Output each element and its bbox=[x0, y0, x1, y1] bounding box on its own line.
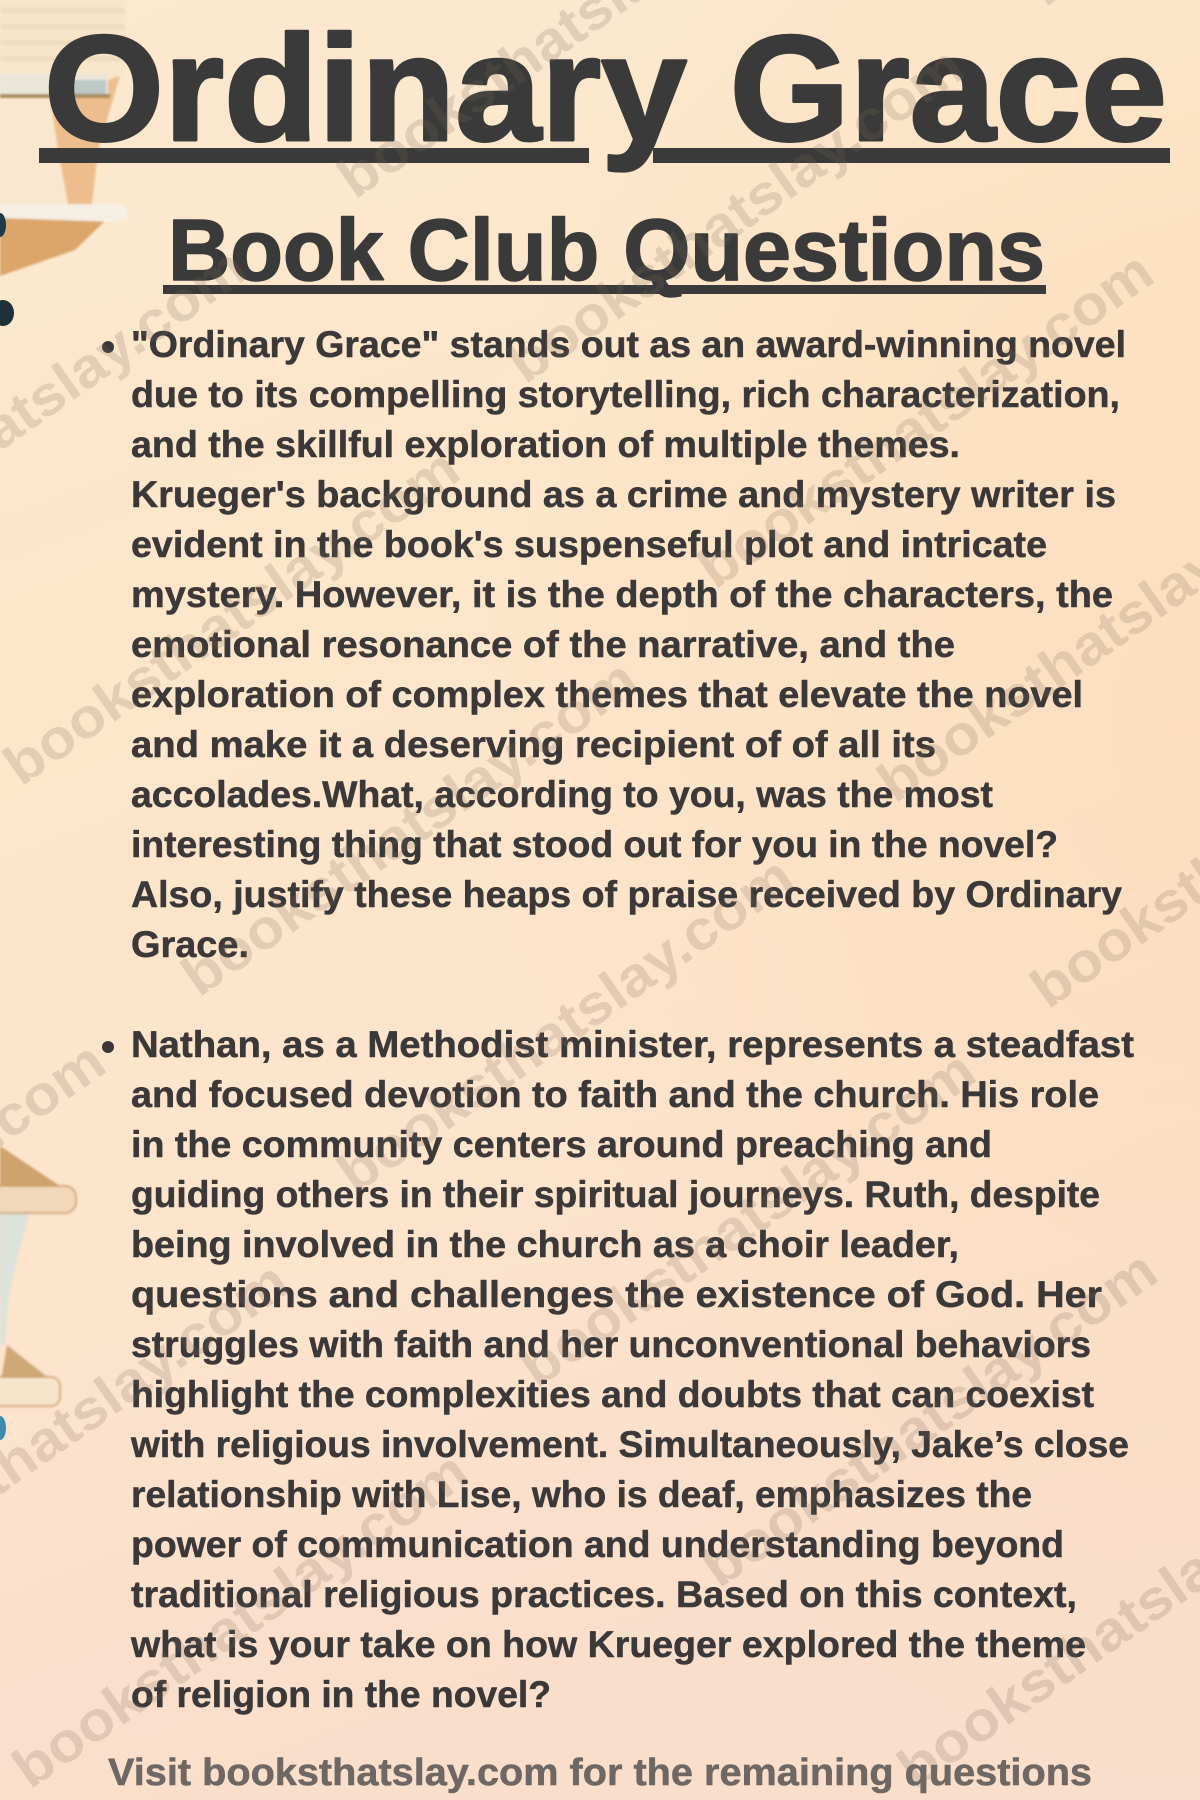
question 1: evident in the book's suspenseful plot and intricate bbox=[131, 524, 1047, 565]
watermarks: booksthatslay.com bbox=[326, 843, 804, 1205]
watermarks: booksthatslay.com bbox=[686, 238, 1164, 600]
subtitle: Book Club Questions bbox=[168, 202, 1045, 299]
question 1: due to its compelling storytelling, rich characterization, bbox=[131, 374, 1120, 415]
left shelf decoration: lower bbox=[0, 1146, 76, 1406]
question 2: traditional religious practices. Based on this context, bbox=[131, 1574, 1077, 1615]
left shelf decoration: small dark knobs bbox=[0, 213, 14, 1440]
watermarks: booksthatslay.com bbox=[0, 435, 470, 797]
question 2 bbox=[102, 1024, 1134, 1715]
question 1: "Ordinary Grace" stands out as an award-winning novel bbox=[131, 324, 1126, 365]
question 2: questions and challenges the existence of God. Her bbox=[131, 1274, 1102, 1315]
watermarks: booksthatslay.com bbox=[508, 1037, 986, 1399]
watermarks: booksthatslay.com bbox=[496, 33, 974, 395]
watermarks: booksthatslay.com bbox=[170, 646, 648, 1008]
question 2: guiding others in their spiritual journeys. Ruth, despite bbox=[131, 1174, 1100, 1215]
left shelf decoration: top bbox=[0, 0, 129, 276]
question 2: what is your take on how Krueger explored the theme bbox=[130, 1624, 1086, 1665]
question 1: interesting thing that stood out for you in the novel? bbox=[131, 824, 1058, 865]
question 2: Nathan, as a Methodist minister, represents a steadfast bbox=[131, 1024, 1134, 1065]
question 2: in the community centers around preaching and bbox=[131, 1124, 992, 1165]
question 1: Grace. bbox=[131, 924, 249, 965]
question 1: and make it a deserving recipient of of all its bbox=[131, 724, 936, 765]
question 2: highlight the complexities and doubts that can coexist bbox=[131, 1374, 1094, 1415]
question 2: of religion in the novel? bbox=[131, 1674, 551, 1715]
question 2: relationship with Lise, who is deaf, emphasizes the bbox=[131, 1474, 1032, 1515]
question 2: struggles with faith and her unconventional behaviors bbox=[131, 1324, 1091, 1365]
question 1: Also, justify these heaps of praise received by Ordinary bbox=[131, 874, 1122, 915]
question 1: mystery. However, it is the depth of the characters, the bbox=[131, 574, 1113, 615]
question 2: with religious involvement. Simultaneously, Jake’s close bbox=[130, 1424, 1129, 1465]
question 2: being involved in the church as a choir leader, bbox=[131, 1224, 959, 1265]
question 1: accolades.What, according to you, was the most bbox=[131, 774, 993, 815]
question 1: and the skillful exploration of multiple themes. bbox=[131, 424, 960, 465]
question 1: exploration of complex themes that elevate the novel bbox=[131, 674, 1083, 715]
title: Ordinary Grace bbox=[44, 4, 1167, 172]
question 2: and focused devotion to faith and the church. His role bbox=[131, 1074, 1099, 1115]
watermarks: booksthatslay.com bbox=[1, 1438, 479, 1800]
question 1: Krueger's background as a crime and mystery writer is bbox=[131, 474, 1116, 515]
watermarks: booksthatslay.com bbox=[690, 1237, 1168, 1599]
question 1: emotional resonance of the narrative, and the bbox=[131, 624, 955, 665]
footer call to action: Visit booksthatslay.com for the remaining questions bbox=[108, 1752, 1092, 1794]
question 1 bbox=[102, 324, 1126, 965]
question 2: power of communication and understanding beyond bbox=[131, 1524, 1064, 1565]
